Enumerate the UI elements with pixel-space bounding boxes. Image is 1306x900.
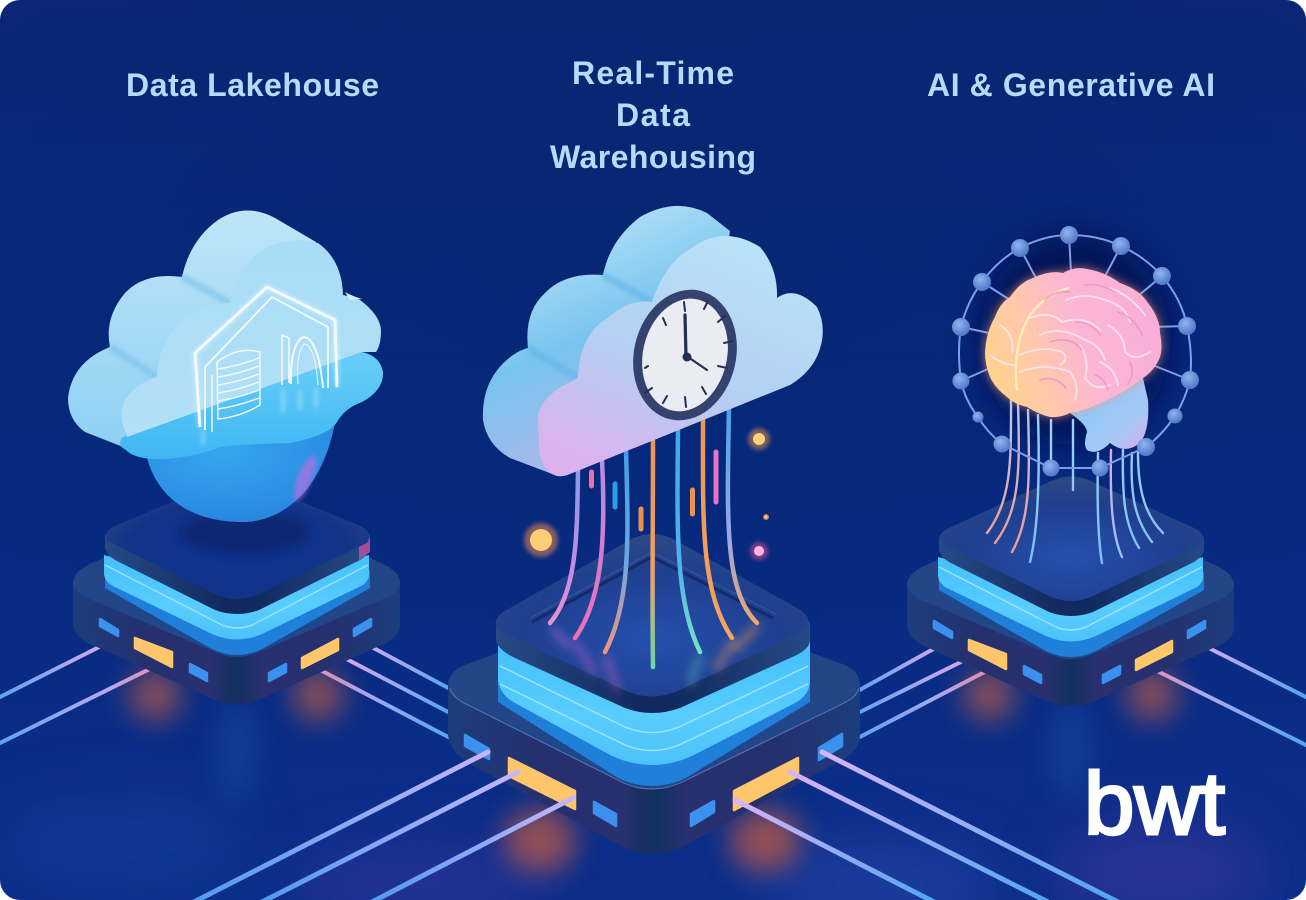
title: AI & Generative AI: AI & Generative AI: [927, 67, 1215, 103]
floating data bars: [592, 452, 716, 529]
cloud back: [483, 206, 730, 475]
connection lines: centre platform: [190, 752, 1122, 900]
title: Real-Time Data Warehousing: Real-Time: [572, 55, 734, 91]
platform: Real-Time Data Warehousing: [448, 534, 860, 872]
platform: Data Lakehouse: [73, 479, 400, 721]
sphere: [147, 422, 335, 522]
icon: warehouse outline: [195, 287, 337, 432]
ports: [934, 621, 1205, 683]
title: Real-Time Data Warehousing: Data: [616, 97, 690, 133]
brain: [985, 268, 1162, 417]
icon: neural network brain: [952, 226, 1199, 563]
glow behind warehouse: [195, 287, 337, 427]
icon: clock cloud: [483, 206, 823, 476]
logo: bwt: bwt: [1084, 754, 1225, 853]
title: Real-Time Data Warehousing: Warehousing: [550, 139, 756, 175]
cloud back: [68, 210, 316, 447]
platform: AI & Generative AI: [907, 476, 1234, 721]
cloud front: [122, 240, 381, 437]
icon: database stack: [217, 350, 260, 419]
title: Data Lakehouse: Data Lakehouse: [126, 67, 379, 103]
water disc: [120, 352, 383, 459]
icon: data streams: [550, 405, 757, 667]
clock: [633, 290, 737, 420]
ports: [465, 734, 842, 826]
connection lines: right platform: [860, 648, 1306, 748]
ports: [100, 619, 371, 681]
title: Real-Time Data Warehousing: [550, 55, 756, 175]
clock hands: [682, 315, 707, 370]
network nodes: [952, 226, 1199, 476]
glowing dots: [524, 428, 770, 560]
icon: data lakehouse cloud: [68, 210, 383, 522]
brain stem: [1070, 378, 1148, 452]
connection lines: left platform: [0, 637, 452, 745]
network ring: [959, 235, 1191, 468]
cloud front: [538, 236, 823, 476]
brain folds: [990, 285, 1150, 400]
fibres to platform: [987, 400, 1163, 563]
